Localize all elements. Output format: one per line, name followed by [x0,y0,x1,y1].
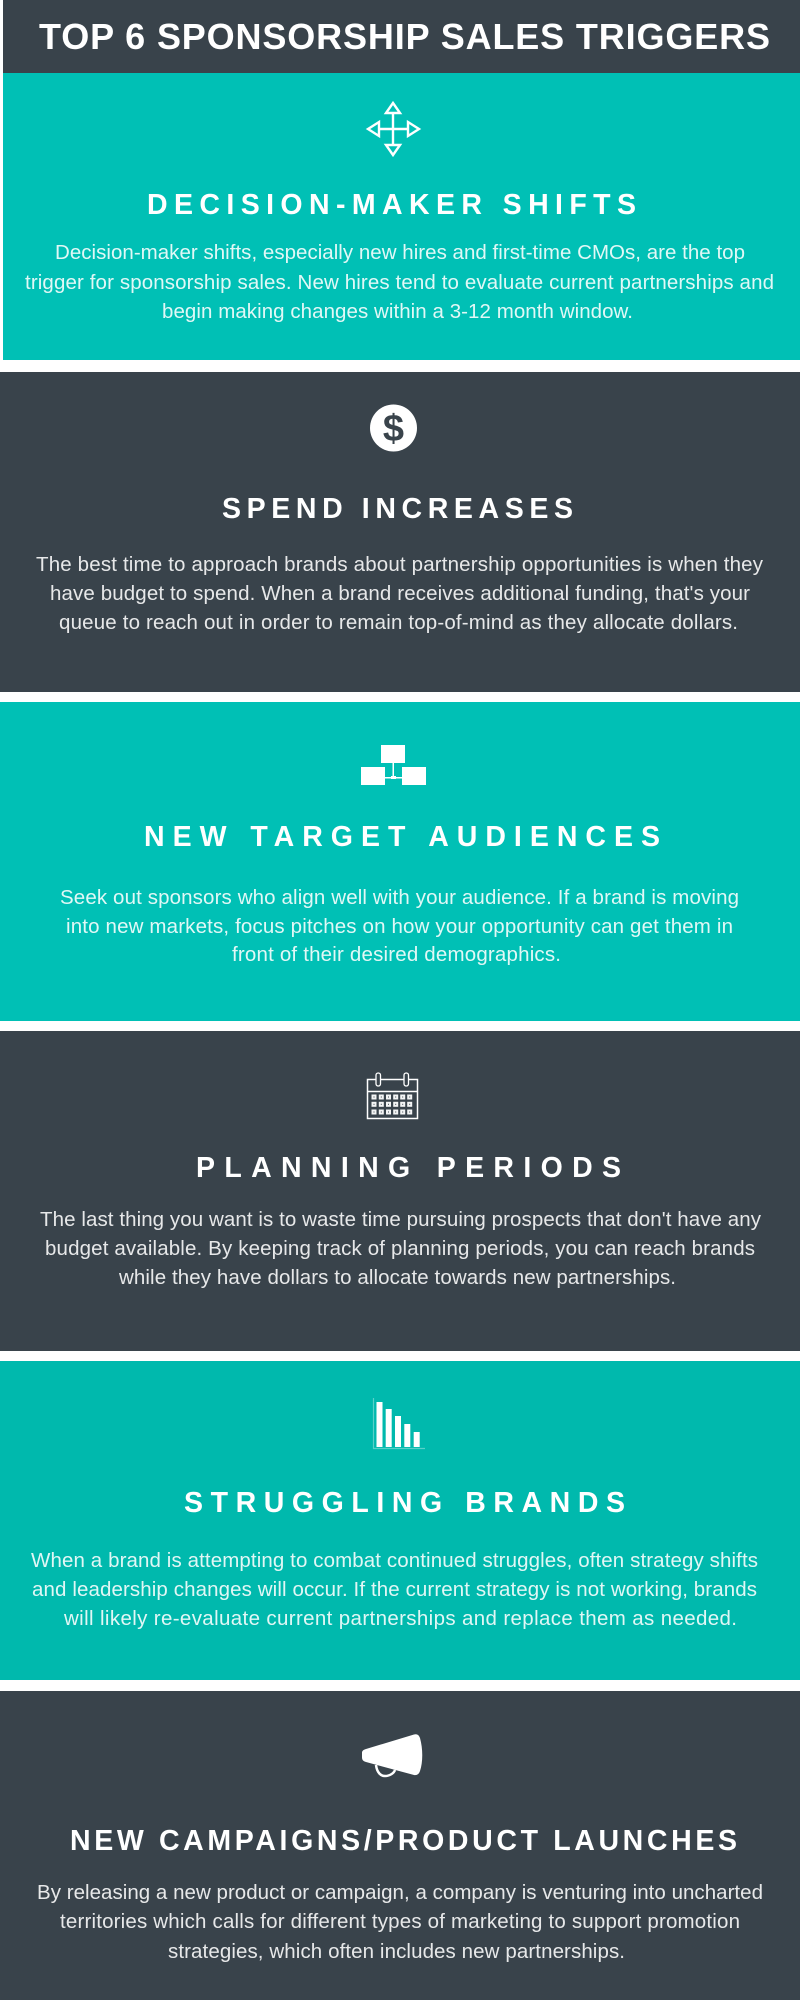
title banner: TOP 6 SPONSORSHIP SALES TRIGGERS [39,16,770,57]
heading: PLANNING PERIODS [196,1152,621,1184]
heading: DECISION-MAKER SHIFTS [147,189,636,221]
body text [37,1881,763,1963]
body text: and leadership changes will occur. If the current strategy is not working, brands [32,1578,757,1601]
body text: By releasing a new product or campaign, a company is venturing into uncharted [37,1881,763,1904]
panel: decision-maker shifts [3,73,800,360]
body text: The last thing you want is to waste time pursuing prospects that don't have any [40,1208,762,1231]
icon: dollar coin: $ [383,408,404,450]
body text [60,886,739,966]
icon: declining bar chart [374,1398,425,1448]
panel: planning periods [0,1031,800,1351]
body text: When a brand is attempting to combat continued struggles, often strategy shifts [31,1549,758,1572]
heading: NEW TARGET AUDIENCES [144,821,660,853]
body text [31,1549,758,1630]
panel: struggling brands [0,1361,800,1680]
panel: spend increases [0,372,800,692]
body text: strategies, which often includes new partnerships. [168,1940,625,1963]
icon: dollar coin [370,404,417,452]
body text: into new markets, focus pitches on how your opportunity can get them in [66,915,733,938]
heading: SPEND INCREASES [222,493,573,525]
body text [25,241,774,323]
heading: NEW CAMPAIGNS/PRODUCT LAUNCHES [70,1825,737,1857]
heading: STRUGGLING BRANDS [184,1487,625,1519]
body text: Seek out sponsors who align well with your audience. If a brand is moving [60,886,739,909]
body text: Decision-maker shifts, especially new hires and first-time CMOs, are the top [55,241,745,264]
icon: calendar [367,1073,418,1118]
body text [36,553,764,634]
body text: will likely re-evaluate current partnerships and replace them as needed. [63,1607,737,1630]
body text: begin making changes within a 3-12 month window. [162,300,633,323]
body text: queue to reach out in order to remain top-of-mind as they allocate dollars. [59,611,738,634]
body text: while they have dollars to allocate towards new partnerships. [118,1266,676,1289]
panel: new campaigns and product launches [0,1691,800,2000]
icon: linked blocks [361,745,426,785]
body text: territories which calls for different types of marketing to support promotion [60,1910,740,1933]
body text: trigger for sponsorship sales. New hires tend to evaluate current partnerships and [25,271,774,294]
body text: budget available. By keeping track of planning periods, you can reach brands [45,1237,755,1260]
title banner [3,0,800,73]
body text: have budget to spend. When a brand receives additional funding, that's your [50,582,750,605]
icon: four-way arrows [368,103,419,155]
icon: megaphone [362,1734,422,1776]
body text: front of their desired demographics. [232,943,561,966]
body text [40,1208,762,1289]
body text: The best time to approach brands about partnership opportunities is when they [36,553,764,576]
panel: new target audiences [0,702,800,1021]
